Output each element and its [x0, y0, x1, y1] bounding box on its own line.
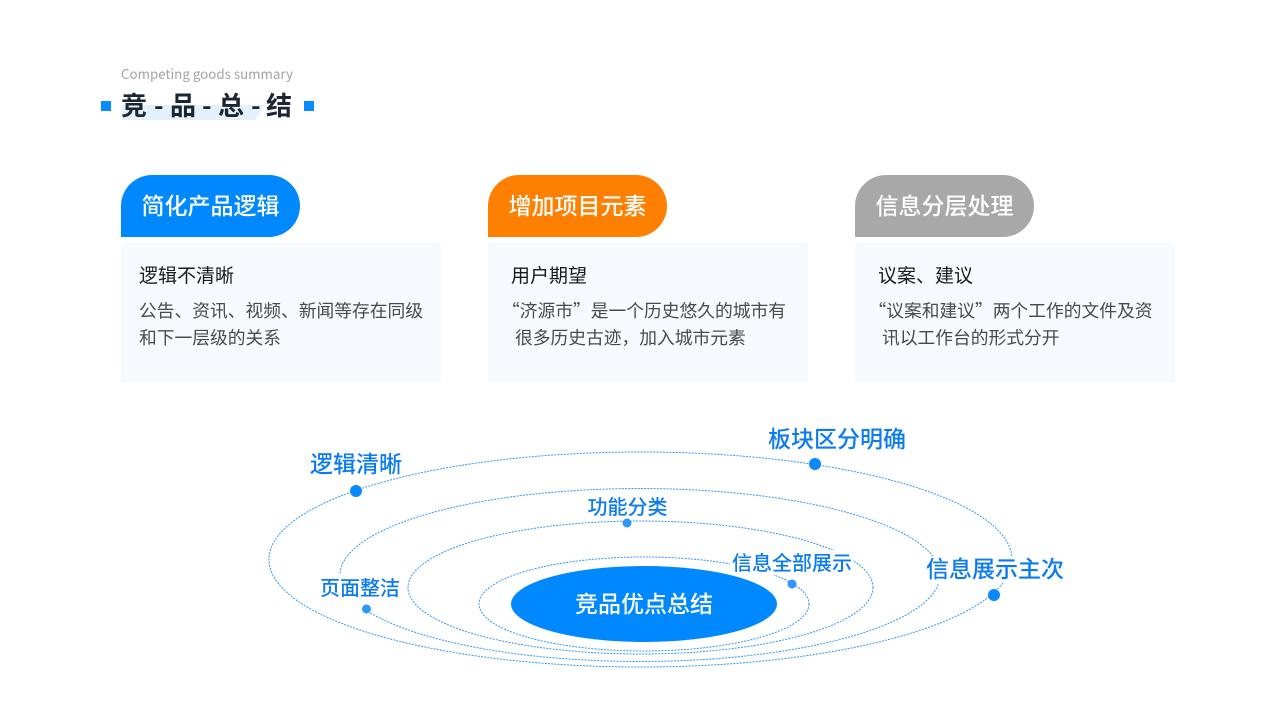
card: elements [488, 243, 808, 382]
card: layers [855, 243, 1175, 382]
card: logic: 和下一层级的关系 [139, 324, 281, 350]
card: layers: “议案和建议”两个工作的文件及资 [868, 297, 1153, 323]
title [121, 86, 292, 123]
card: layers: 讯以工作台的形式分开 [882, 324, 1060, 350]
card: logic: 逻辑不清晰 [139, 261, 234, 288]
pill: elements [488, 175, 667, 237]
pill: layers [855, 175, 1034, 237]
pill: layers: 信息分层处理 [876, 187, 1014, 221]
title: 结 [266, 86, 292, 123]
title: 竞 [121, 86, 147, 123]
card: elements: 用户期望 [511, 261, 587, 288]
panel: layers [855, 175, 1175, 382]
header [101, 64, 314, 123]
title: - [154, 86, 164, 123]
panel: logic [121, 175, 441, 382]
node: logic clear: 逻辑清晰 [310, 445, 402, 479]
node: all info [730, 547, 854, 588]
node: function: 功能分类 [588, 491, 668, 520]
node: hierarchy: 信息展示主次 [926, 550, 1064, 584]
title: 总 [218, 86, 244, 123]
title: - [251, 86, 261, 123]
pill: logic: 简化产品逻辑 [142, 187, 280, 221]
node: blocks [768, 420, 906, 470]
core ellipse: 竞品优点总结 [575, 585, 713, 619]
node: all info: 信息全部展示 [732, 547, 852, 576]
card: elements: 很多历史古迹，加入城市元素 [515, 324, 746, 350]
title: 品 [170, 86, 196, 123]
node: blocks: 板块区分明确 [768, 420, 906, 454]
node: page tidy: 页面整洁 [320, 572, 400, 601]
core ellipse [511, 566, 777, 642]
pill: logic [121, 175, 300, 237]
panel: elements [488, 175, 808, 382]
pill: elements: 增加项目元素 [508, 187, 646, 221]
card: elements: “济源市”是一个历史悠久的城市有 [502, 297, 786, 323]
card: layers: 议案、建议 [878, 261, 973, 288]
bullet left [101, 101, 111, 111]
card: logic [121, 243, 441, 382]
node: page tidy [318, 572, 402, 614]
bullet right [304, 101, 314, 111]
title: - [202, 86, 212, 123]
title highlight [122, 105, 265, 120]
card: logic: 公告、资讯、视频、新闻等存在同级 [139, 297, 423, 323]
subtitle: Competing goods summary [121, 64, 293, 83]
node: logic clear [310, 445, 402, 497]
node: hierarchy [925, 550, 1066, 601]
